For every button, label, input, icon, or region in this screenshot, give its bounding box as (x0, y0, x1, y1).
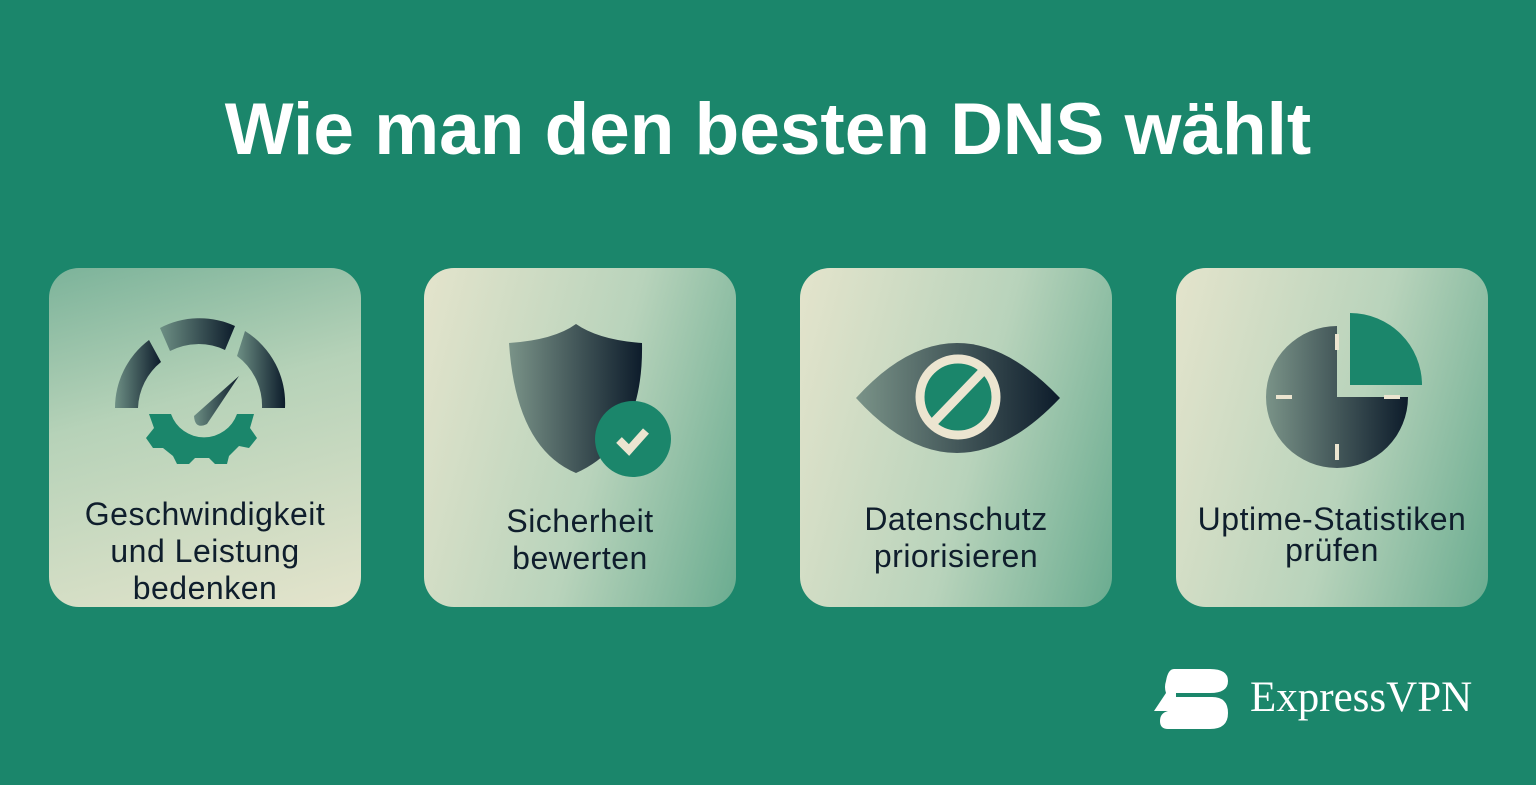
label: Sicherheit (506, 503, 654, 539)
label: prüfen (1285, 532, 1379, 568)
label: bedenken (133, 570, 277, 606)
icon: speedometer gear (115, 318, 286, 464)
label: Geschwindigkeit (85, 496, 325, 532)
label: priorisieren (874, 538, 1038, 574)
logo: ExpressVPN (1154, 669, 1472, 729)
label: Uptime-Statistiken (1198, 501, 1466, 537)
icon: shield check (509, 324, 671, 477)
label (506, 503, 654, 576)
label: und Leistung (110, 533, 300, 569)
panel: uptime (1176, 268, 1488, 607)
logo: ExpressVPN: ExpressVPN (1250, 674, 1472, 721)
panel: privacy (800, 268, 1112, 607)
title: Wie man den besten DNS wählt (225, 89, 1311, 170)
icon: eye blocked (856, 343, 1060, 453)
label: bewerten (512, 540, 648, 576)
label (864, 501, 1048, 574)
label: Datenschutz (864, 501, 1048, 537)
panel: security (424, 268, 736, 607)
icon: clock pie (1266, 313, 1422, 468)
label (85, 496, 325, 606)
label (1198, 501, 1466, 568)
panel: speed (49, 268, 361, 607)
